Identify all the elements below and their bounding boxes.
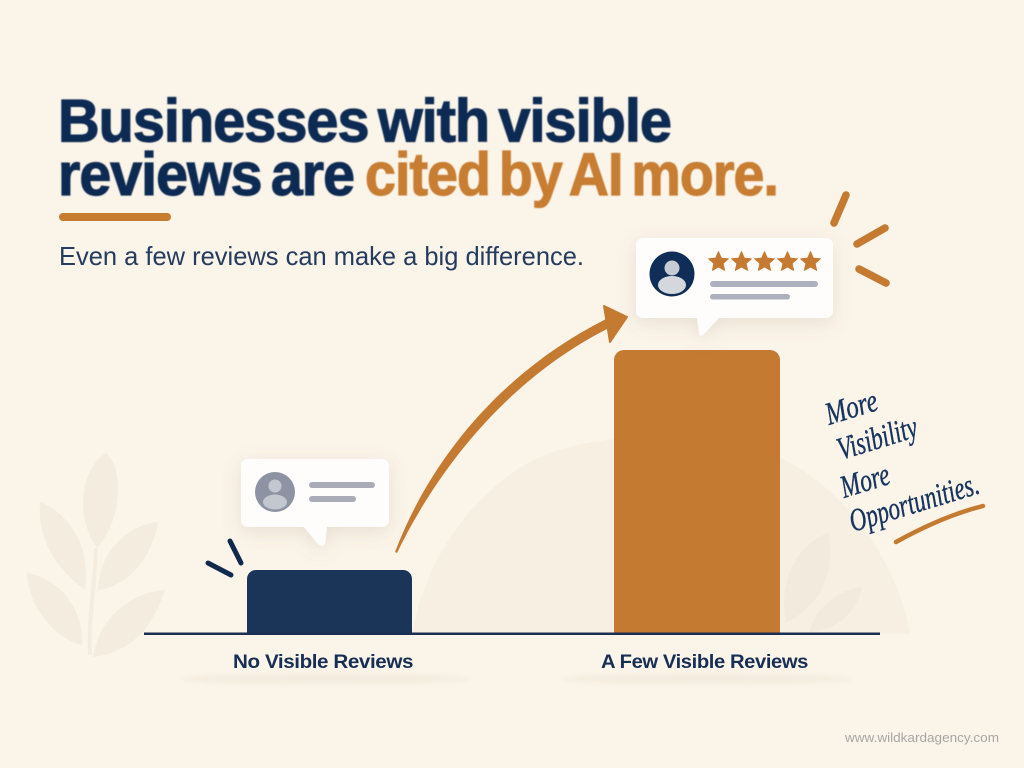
growth arrow (395, 306, 627, 553)
background plant left (27, 453, 165, 657)
icon: grey avatar (255, 472, 295, 512)
baseline axis (144, 632, 880, 635)
website credit: www.wildkardagency.com (844, 730, 999, 745)
background leaves right (784, 533, 862, 632)
handwritten underline (896, 506, 983, 542)
handwritten note: More (820, 382, 882, 432)
five stars (708, 252, 820, 270)
handwritten note: More (835, 456, 894, 505)
speech bubble: no reviews (241, 459, 389, 546)
speech bubble: five star review (636, 238, 833, 336)
placeholder text lines (309, 482, 375, 502)
icon: navy avatar (650, 252, 694, 296)
background hill shape (412, 437, 910, 634)
ground shadows (181, 673, 853, 685)
emphasis ticks: orange (834, 195, 886, 283)
bar: no visible reviews (247, 570, 412, 634)
label: no visible reviews: No Visible Reviews (233, 651, 414, 673)
title: reviews are (58, 141, 354, 208)
bar: a few visible reviews (614, 350, 780, 634)
emphasis ticks: navy (208, 541, 241, 575)
review text lines (710, 281, 818, 300)
subtitle: Even a few reviews can make a big difference. (59, 241, 584, 271)
title: Businesses with visible (58, 88, 671, 154)
title (58, 88, 778, 208)
handwritten note: Visibility (833, 408, 922, 467)
label: a few visible reviews: A Few Visible Reviews (601, 651, 809, 673)
handwritten note (820, 382, 983, 539)
title underline (59, 213, 171, 221)
title: cited by AI more. (365, 141, 778, 208)
